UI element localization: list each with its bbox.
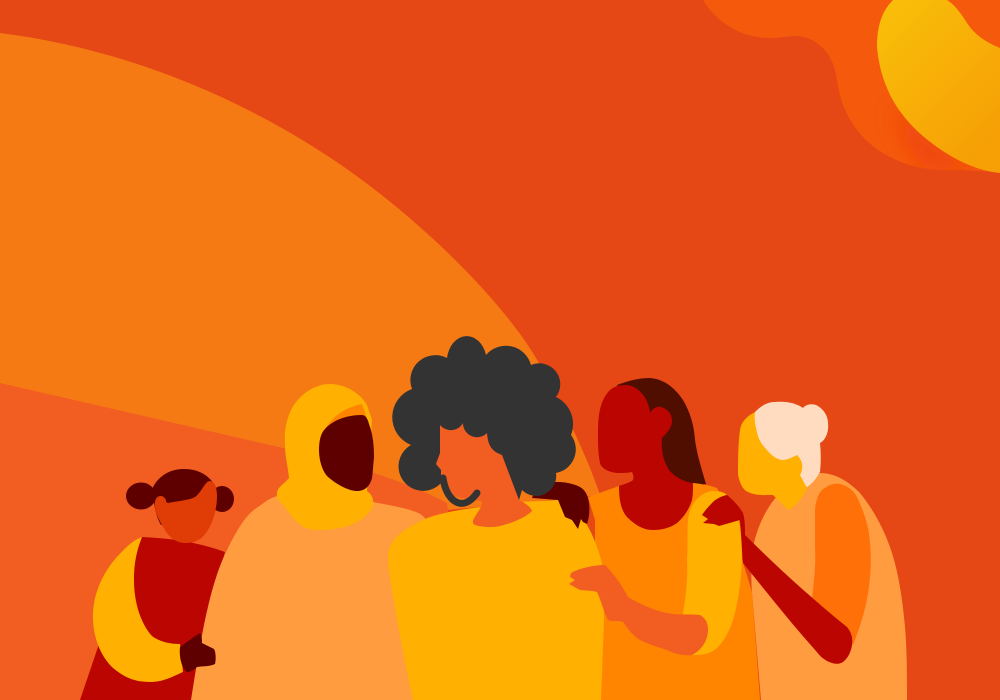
- face and neck: [436, 410, 532, 527]
- curly hair: [392, 336, 576, 503]
- person: child sleeve: [93, 537, 183, 682]
- body: [191, 496, 440, 700]
- scarf band: [323, 404, 367, 433]
- person: woman in hijab: [191, 384, 440, 700]
- head and neck: [598, 385, 693, 530]
- sleeve: [812, 484, 871, 645]
- hair: [617, 378, 706, 490]
- person: child dress: [80, 537, 225, 700]
- hair: [748, 402, 828, 487]
- headscarf: [277, 384, 373, 530]
- orange arm and hand: [569, 565, 708, 655]
- large orange hill: [0, 33, 600, 510]
- face: [319, 415, 374, 491]
- lower left ground shape: [0, 383, 470, 700]
- hair strand: [443, 478, 477, 503]
- red arm and hand: [702, 495, 852, 664]
- dress: [588, 483, 760, 700]
- face: [155, 481, 217, 543]
- person: older woman: [738, 402, 907, 700]
- blob shadow: [897, 116, 964, 170]
- person: child head: [126, 469, 234, 543]
- child hand: [180, 633, 216, 672]
- dark hand on shoulder: [532, 482, 589, 529]
- body: [751, 473, 907, 700]
- body: [388, 500, 604, 700]
- hair buns and crown: [126, 469, 234, 525]
- sleeve: [683, 491, 742, 655]
- top right orange blob: [703, 0, 1000, 172]
- person: central woman: [388, 336, 604, 700]
- top right yellow blob: [877, 0, 1000, 173]
- face: [738, 412, 807, 510]
- person: woman with long hair: [588, 378, 760, 700]
